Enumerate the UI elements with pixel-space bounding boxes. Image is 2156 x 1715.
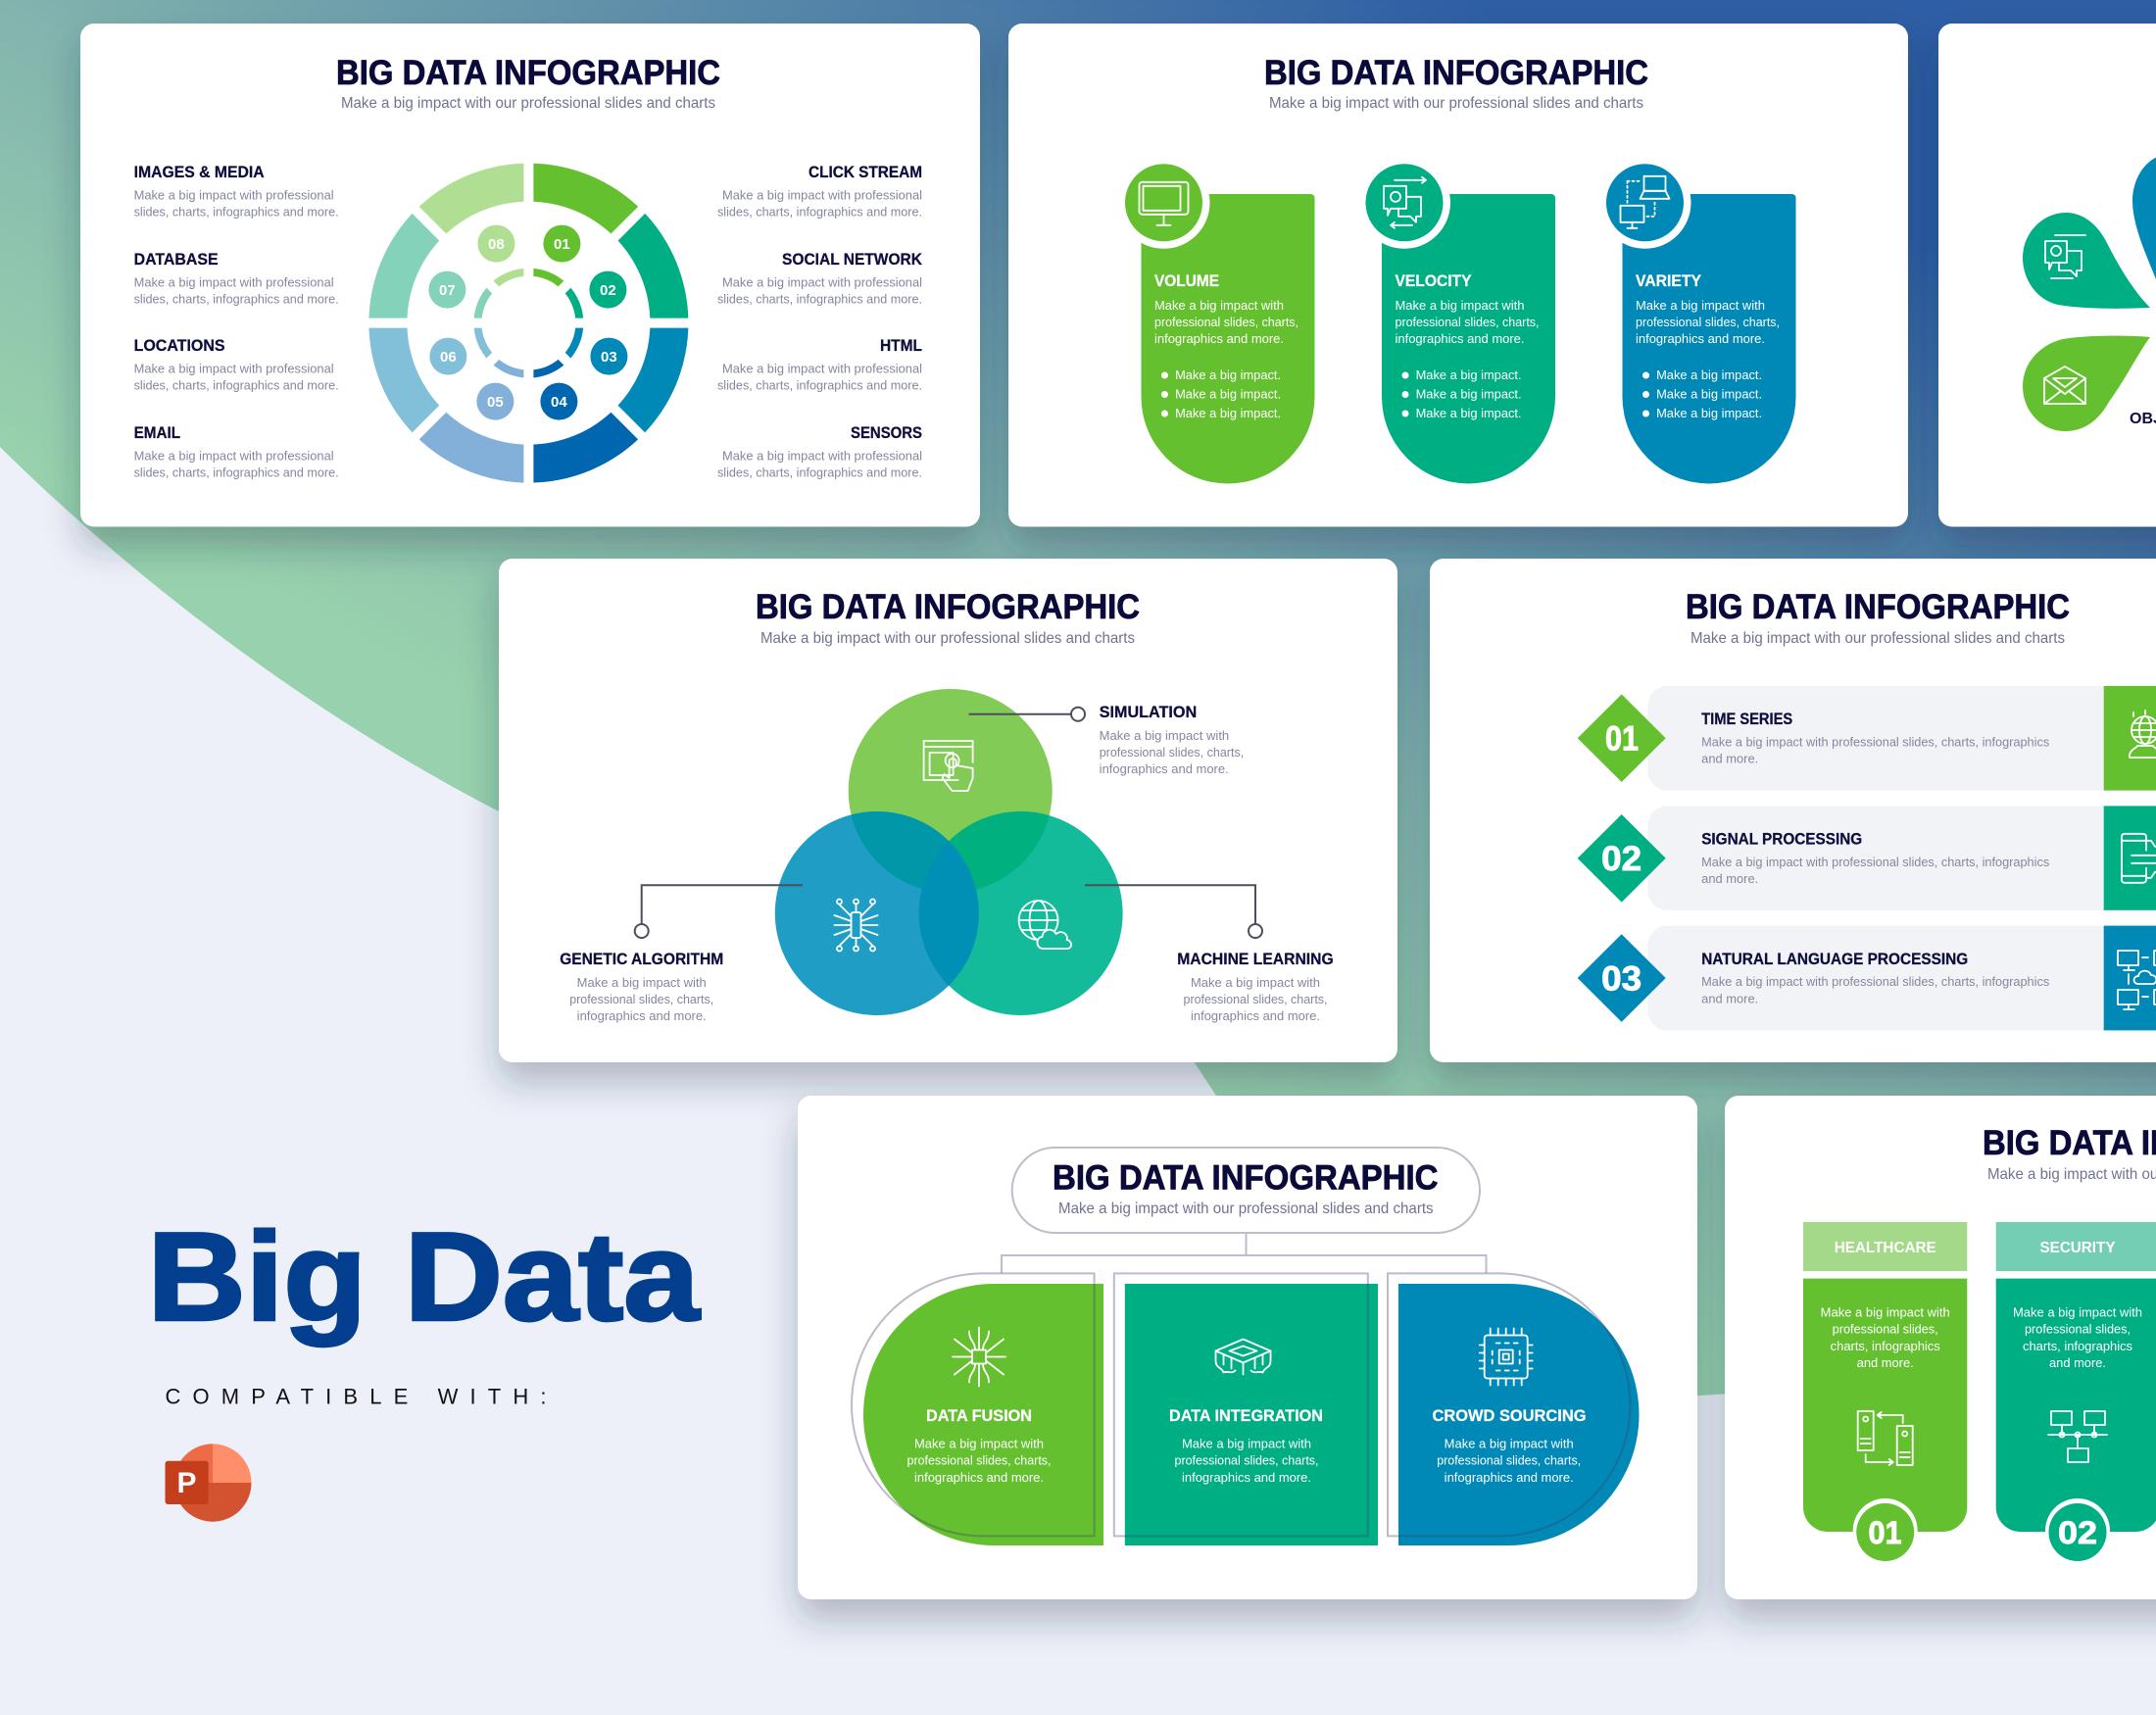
icon: cloud network <box>2118 951 2156 1009</box>
column: security: charts, infographics <box>2023 1340 2132 1353</box>
left labels: Make a big impact with professional <box>134 450 334 464</box>
column: velocity: VELOCITY <box>1396 272 1472 290</box>
donut chart: 06 <box>440 349 457 366</box>
segment: data integration <box>1114 1273 1378 1545</box>
column: healthcare: HEALTHCARE <box>1835 1240 1936 1256</box>
column: velocity: Make a big impact. <box>1416 388 1522 402</box>
icon: processor <box>1215 1339 1270 1374</box>
label: genetic algorithm <box>560 951 723 1023</box>
icon: chip burst <box>953 1327 1005 1386</box>
left labels: slides, charts, infographics and more. <box>134 466 339 480</box>
connector tree <box>1002 1233 1486 1273</box>
subtitle: Make a big impact with our professional slides and charts <box>1690 630 2065 647</box>
column: variety: Make a big impact. <box>1656 407 1762 420</box>
right labels <box>717 164 922 480</box>
label: simulation: infographics and more. <box>1100 762 1229 776</box>
segment: data integration: infographics and more. <box>1182 1471 1311 1485</box>
label: genetic algorithm: Make a big impact with <box>577 976 707 990</box>
right labels: Make a big impact with professional <box>722 450 922 464</box>
title: BIG DATA INFOGRAPHIC <box>1053 1158 1439 1197</box>
icon: globe and cloud <box>1019 901 1071 949</box>
right labels: slides, charts, infographics and more. <box>717 206 922 220</box>
column: velocity <box>1358 157 1555 484</box>
column: velocity: Make a big impact. <box>1416 407 1522 420</box>
connector: machine learning <box>1085 885 1262 938</box>
column: volume: Make a big impact. <box>1175 388 1281 402</box>
right labels: HTML <box>880 337 922 355</box>
panel: venn slide <box>499 559 1397 1062</box>
segment: crowd sourcing: CROWD SOURCING <box>1433 1407 1586 1425</box>
petal: teal with chat icon <box>2023 213 2150 309</box>
column: volume <box>1117 157 1315 484</box>
icon: monitor <box>1139 182 1188 225</box>
row: signal processing: SIGNAL PROCESSING <box>1701 830 1862 848</box>
label: simulation <box>1100 704 1244 776</box>
label: machine learning: MACHINE LEARNING <box>1177 951 1334 968</box>
column: security: Make a big impact with <box>2013 1305 2142 1319</box>
left labels: DATABASE <box>134 251 219 269</box>
label: machine learning: professional slides, charts, <box>1184 993 1327 1006</box>
icon: phone signal <box>2122 834 2156 883</box>
petal: blue <box>2132 154 2156 294</box>
icon: servers <box>1858 1411 1913 1465</box>
segment: crowd sourcing: professional slides, charts, <box>1437 1454 1581 1468</box>
column: velocity: Make a big impact. <box>1416 368 1522 382</box>
segment: data fusion: infographics and more. <box>914 1471 1044 1485</box>
row: signal processing <box>1578 806 2156 910</box>
icon: laptop and desktop <box>1621 176 1670 228</box>
row: natural language processing: NATURAL LANGUAGE PROCESSING <box>1701 951 1968 968</box>
column: variety <box>1599 157 1795 484</box>
column: variety: Make a big impact. <box>1656 388 1762 402</box>
column: security: SECURITY <box>2040 1240 2116 1256</box>
left labels: Make a big impact with professional <box>134 276 334 290</box>
panel: industries slide (cropped) <box>1725 1096 2156 1599</box>
icon: globe on stand <box>2130 710 2156 758</box>
column: velocity: professional slides, charts, <box>1396 316 1539 329</box>
panel: donut slide <box>80 24 980 527</box>
right labels: Make a big impact with professional <box>722 189 922 203</box>
label: genetic algorithm: GENETIC ALGORITHM <box>560 951 723 968</box>
donut chart: 02 <box>600 282 616 299</box>
column: healthcare: charts, infographics <box>1831 1340 1940 1353</box>
column: security: 02 <box>2058 1515 2097 1550</box>
segment: data integration: professional slides, charts, <box>1174 1454 1319 1468</box>
donut chart: 03 <box>601 349 617 366</box>
column: healthcare: professional slides, <box>1833 1323 1938 1337</box>
segment: data fusion <box>852 1273 1103 1545</box>
column: variety: Make a big impact with <box>1636 299 1765 313</box>
segment: crowd sourcing: Make a big impact with <box>1445 1437 1574 1450</box>
label: genetic algorithm: infographics and more. <box>577 1009 707 1023</box>
column: variety: Make a big impact. <box>1656 368 1762 382</box>
right labels: slides, charts, infographics and more. <box>717 379 922 393</box>
right labels: slides, charts, infographics and more. <box>717 293 922 307</box>
venn diagram <box>775 689 1123 1015</box>
row: natural language processing: and more. <box>1701 992 1758 1005</box>
icon: powerpoint logo: P <box>176 1467 197 1499</box>
row: signal processing: and more. <box>1701 872 1758 886</box>
connector: genetic algorithm <box>635 885 803 938</box>
left labels: slides, charts, infographics and more. <box>134 206 339 220</box>
left labels: EMAIL <box>134 424 180 442</box>
panel: petal slide (cropped) <box>1938 24 2156 527</box>
title: BIG DATA INFOGRAPHIC <box>336 54 720 92</box>
column: volume: VOLUME <box>1154 272 1219 290</box>
column: healthcare: Make a big impact with <box>1821 1305 1950 1319</box>
row: natural language processing: Make a big impact with professional slides, charts, infographics <box>1701 975 2049 989</box>
icon: cpu <box>1480 1329 1533 1386</box>
donut chart: 01 <box>554 236 570 253</box>
subtitle: Make a big impact with our professional slides and charts <box>760 630 1135 647</box>
subtitle: Make a big impact with our professional slides and charts <box>1269 95 1643 112</box>
left labels: Make a big impact with professional <box>134 189 334 203</box>
icon: chat bubbles <box>1384 177 1426 228</box>
column: healthcare: and more. <box>1857 1356 1914 1370</box>
segment: data fusion: professional slides, charts, <box>907 1454 1051 1468</box>
column: volume: professional slides, charts, <box>1154 316 1298 329</box>
background pale curved area <box>0 447 2156 1715</box>
label: simulation: SIMULATION <box>1100 704 1197 721</box>
segment: data integration: Make a big impact with <box>1182 1437 1311 1450</box>
segment: data fusion: Make a big impact with <box>914 1437 1044 1450</box>
segment: data fusion: DATA FUSION <box>926 1407 1032 1425</box>
label: machine learning: infographics and more. <box>1191 1009 1320 1023</box>
donut chart: 07 <box>439 282 456 299</box>
column: variety: professional slides, charts, <box>1636 316 1780 329</box>
label: machine learning: Make a big impact with <box>1191 976 1320 990</box>
row: time series: 01 <box>1605 720 1639 759</box>
icon: network <box>2048 1411 2107 1462</box>
row: time series <box>1578 686 2156 791</box>
label: simulation: Make a big impact with <box>1100 729 1229 743</box>
column: security: and more. <box>2049 1356 2106 1370</box>
right labels: Make a big impact with professional <box>722 363 922 376</box>
subtitle: Make a big impact with our professional slides and charts <box>341 95 715 112</box>
donut chart: 04 <box>551 394 567 411</box>
label: machine learning <box>1177 951 1334 1023</box>
compatible with label: COMPATIBLE WITH: <box>165 1385 547 1409</box>
right labels: SOCIAL NETWORK <box>782 251 922 269</box>
title: BIG DATA INFOGRAPHIC <box>1264 54 1648 92</box>
panel: list slide <box>1430 559 2156 1062</box>
left labels: LOCATIONS <box>134 337 225 355</box>
segment: data integration: DATA INTEGRATION <box>1169 1407 1323 1425</box>
row: natural language processing <box>1578 926 2156 1030</box>
column: healthcare <box>1803 1222 1967 1563</box>
main heading: Big Data <box>147 1207 700 1348</box>
title pill <box>1012 1148 1480 1233</box>
label: simulation: professional slides, charts, <box>1100 746 1244 760</box>
icon: touch screen <box>924 741 973 791</box>
title: BIG DATA INFOGRAPHIC <box>756 588 1140 626</box>
donut chart <box>362 157 695 490</box>
column: variety: infographics and more. <box>1636 332 1765 346</box>
row: time series: and more. <box>1701 753 1758 766</box>
panel: three part capsule slide <box>798 1096 1697 1599</box>
title: BIG DATA INFOGRAPHIC <box>1686 588 2070 626</box>
row: natural language processing: 03 <box>1601 959 1642 998</box>
column: velocity: infographics and more. <box>1396 332 1525 346</box>
right labels: CLICK STREAM <box>808 164 922 181</box>
column: security <box>1996 1222 2156 1563</box>
right labels: Make a big impact with professional <box>722 276 922 290</box>
left labels: slides, charts, infographics and more. <box>134 293 339 307</box>
column: velocity: Make a big impact with <box>1396 299 1525 313</box>
petal: green with envelope icon <box>2023 336 2150 431</box>
column: volume: Make a big impact. <box>1175 368 1281 382</box>
left labels <box>134 164 339 480</box>
column: volume: Make a big impact. <box>1175 407 1281 420</box>
label: genetic algorithm: professional slides, charts, <box>569 993 713 1006</box>
left labels: Make a big impact with professional <box>134 363 334 376</box>
icon: powerpoint logo <box>165 1444 251 1522</box>
column: healthcare: 01 <box>1868 1515 1901 1550</box>
row: time series: TIME SERIES <box>1701 710 1792 728</box>
column: security: professional slides, <box>2025 1323 2131 1337</box>
right labels: slides, charts, infographics and more. <box>717 466 922 480</box>
segment: crowd sourcing <box>1388 1273 1640 1545</box>
connector: simulation <box>969 708 1085 721</box>
left labels: IMAGES & MEDIA <box>134 164 265 181</box>
icon: circuit chip <box>835 900 878 951</box>
column: variety: VARIETY <box>1636 272 1701 290</box>
panel: volume velocity variety slide <box>1008 24 1908 527</box>
donut chart: 08 <box>488 236 505 253</box>
row: signal processing: 02 <box>1601 840 1642 878</box>
right labels: SENSORS <box>851 424 922 442</box>
column: volume: Make a big impact with <box>1154 299 1284 313</box>
subtitle: Make a big impact with our professional slides and charts <box>1058 1200 1434 1217</box>
donut chart: 05 <box>487 394 504 411</box>
left labels: slides, charts, infographics and more. <box>134 379 339 393</box>
row: signal processing: Make a big impact with professional slides, charts, infographics <box>1701 856 2049 869</box>
segment: crowd sourcing: infographics and more. <box>1445 1471 1574 1485</box>
row: time series: Make a big impact with professional slides, charts, infographics <box>1701 735 2049 749</box>
column: volume: infographics and more. <box>1154 332 1284 346</box>
